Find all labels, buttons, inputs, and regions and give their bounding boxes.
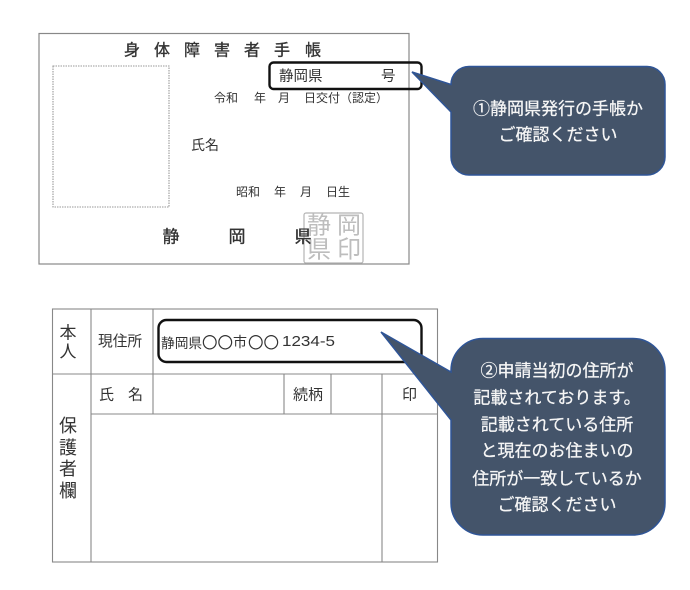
highlight box: address xyxy=(158,320,422,362)
card title: 害 xyxy=(214,42,230,60)
label: guardian name: 名 xyxy=(128,386,143,404)
prefecture and number line: 号 xyxy=(381,69,396,85)
label: guardian name: 氏 xyxy=(99,386,114,404)
label: seal: 印 xyxy=(402,386,417,404)
prefecture and number line xyxy=(279,68,396,85)
callout 1 text: ご確認ください xyxy=(498,126,618,144)
card outline xyxy=(39,34,409,264)
issue date line: 令和 xyxy=(214,91,238,105)
callout 2 text: ②申請当初の住所が xyxy=(480,362,634,380)
callout 2 text: 記載されております。 xyxy=(473,388,641,408)
label: applicant: 人 xyxy=(60,342,76,362)
callout 2 text: 記載されている住所 xyxy=(481,416,633,434)
callout 2 text xyxy=(472,362,642,514)
callout 2 text: と現在のお住まいの xyxy=(480,442,634,460)
label: relationship: 続柄 xyxy=(293,386,323,404)
label: applicant xyxy=(60,324,76,362)
issue date line: 月 xyxy=(278,91,290,105)
address value: 〇〇 xyxy=(248,331,279,353)
label: guardian section: 護 xyxy=(59,438,77,458)
callout 1: check issuing prefecture xyxy=(412,66,665,175)
issue date line: 日交付（認定） xyxy=(304,91,388,105)
issuer name: 岡 xyxy=(228,228,246,246)
photo area xyxy=(53,66,169,207)
callout 2 bubble xyxy=(381,332,665,535)
official seal: 岡 xyxy=(337,212,361,240)
address value: 1234-5 xyxy=(282,334,335,350)
card title: 体 xyxy=(154,42,170,60)
issuer name xyxy=(162,228,312,246)
callout 2: check address matches xyxy=(381,332,665,535)
birth date line: 日生 xyxy=(326,185,350,199)
label: guardian section xyxy=(59,416,77,501)
label: applicant: 本 xyxy=(60,324,76,342)
birth date line: 年 xyxy=(274,185,286,199)
callout 1 text: ①静岡県発行の手帳か xyxy=(473,100,643,118)
callout 2 text: 住所が一致しているか xyxy=(472,470,642,488)
card title: 帳 xyxy=(305,42,321,60)
label: guardian section: 欄 xyxy=(59,481,77,501)
prefecture and number line: 静岡県 xyxy=(279,68,322,85)
callout 1 bubble xyxy=(412,66,665,175)
label: guardian name xyxy=(99,386,143,404)
card title: 障 xyxy=(184,42,200,60)
callout 1 text xyxy=(473,100,643,144)
label: current address: 現住所 xyxy=(98,333,142,350)
address value: 〇〇 xyxy=(202,331,233,353)
table grid xyxy=(52,309,438,562)
official seal: 県 xyxy=(307,236,331,264)
official seal: 静 xyxy=(307,212,331,240)
issue date line: 年 xyxy=(254,91,266,105)
birth date line xyxy=(236,185,350,199)
card title: 者 xyxy=(244,42,260,60)
issue date line xyxy=(214,91,388,105)
birth date line: 昭和 xyxy=(236,185,260,199)
address value: 静岡県 xyxy=(161,332,202,352)
card title xyxy=(124,42,321,60)
label: guardian section: 者 xyxy=(59,459,77,479)
panel: disability certificate card xyxy=(39,34,422,264)
official seal xyxy=(304,212,363,264)
label: guardian section: 保 xyxy=(59,416,77,436)
issuer name: 県 xyxy=(294,228,312,246)
address value: 市 xyxy=(233,332,247,352)
card title: 手 xyxy=(274,42,290,60)
official seal: 印 xyxy=(337,236,361,264)
issuer name: 静 xyxy=(162,228,180,246)
name label: 氏名 xyxy=(191,137,219,153)
address value xyxy=(161,331,335,353)
card title: 身 xyxy=(124,42,140,60)
callout 2 text: ご確認ください xyxy=(498,496,616,514)
birth date line: 月 xyxy=(300,185,312,199)
highlight box: certificate number xyxy=(270,62,422,89)
panel: address form table xyxy=(52,309,438,562)
